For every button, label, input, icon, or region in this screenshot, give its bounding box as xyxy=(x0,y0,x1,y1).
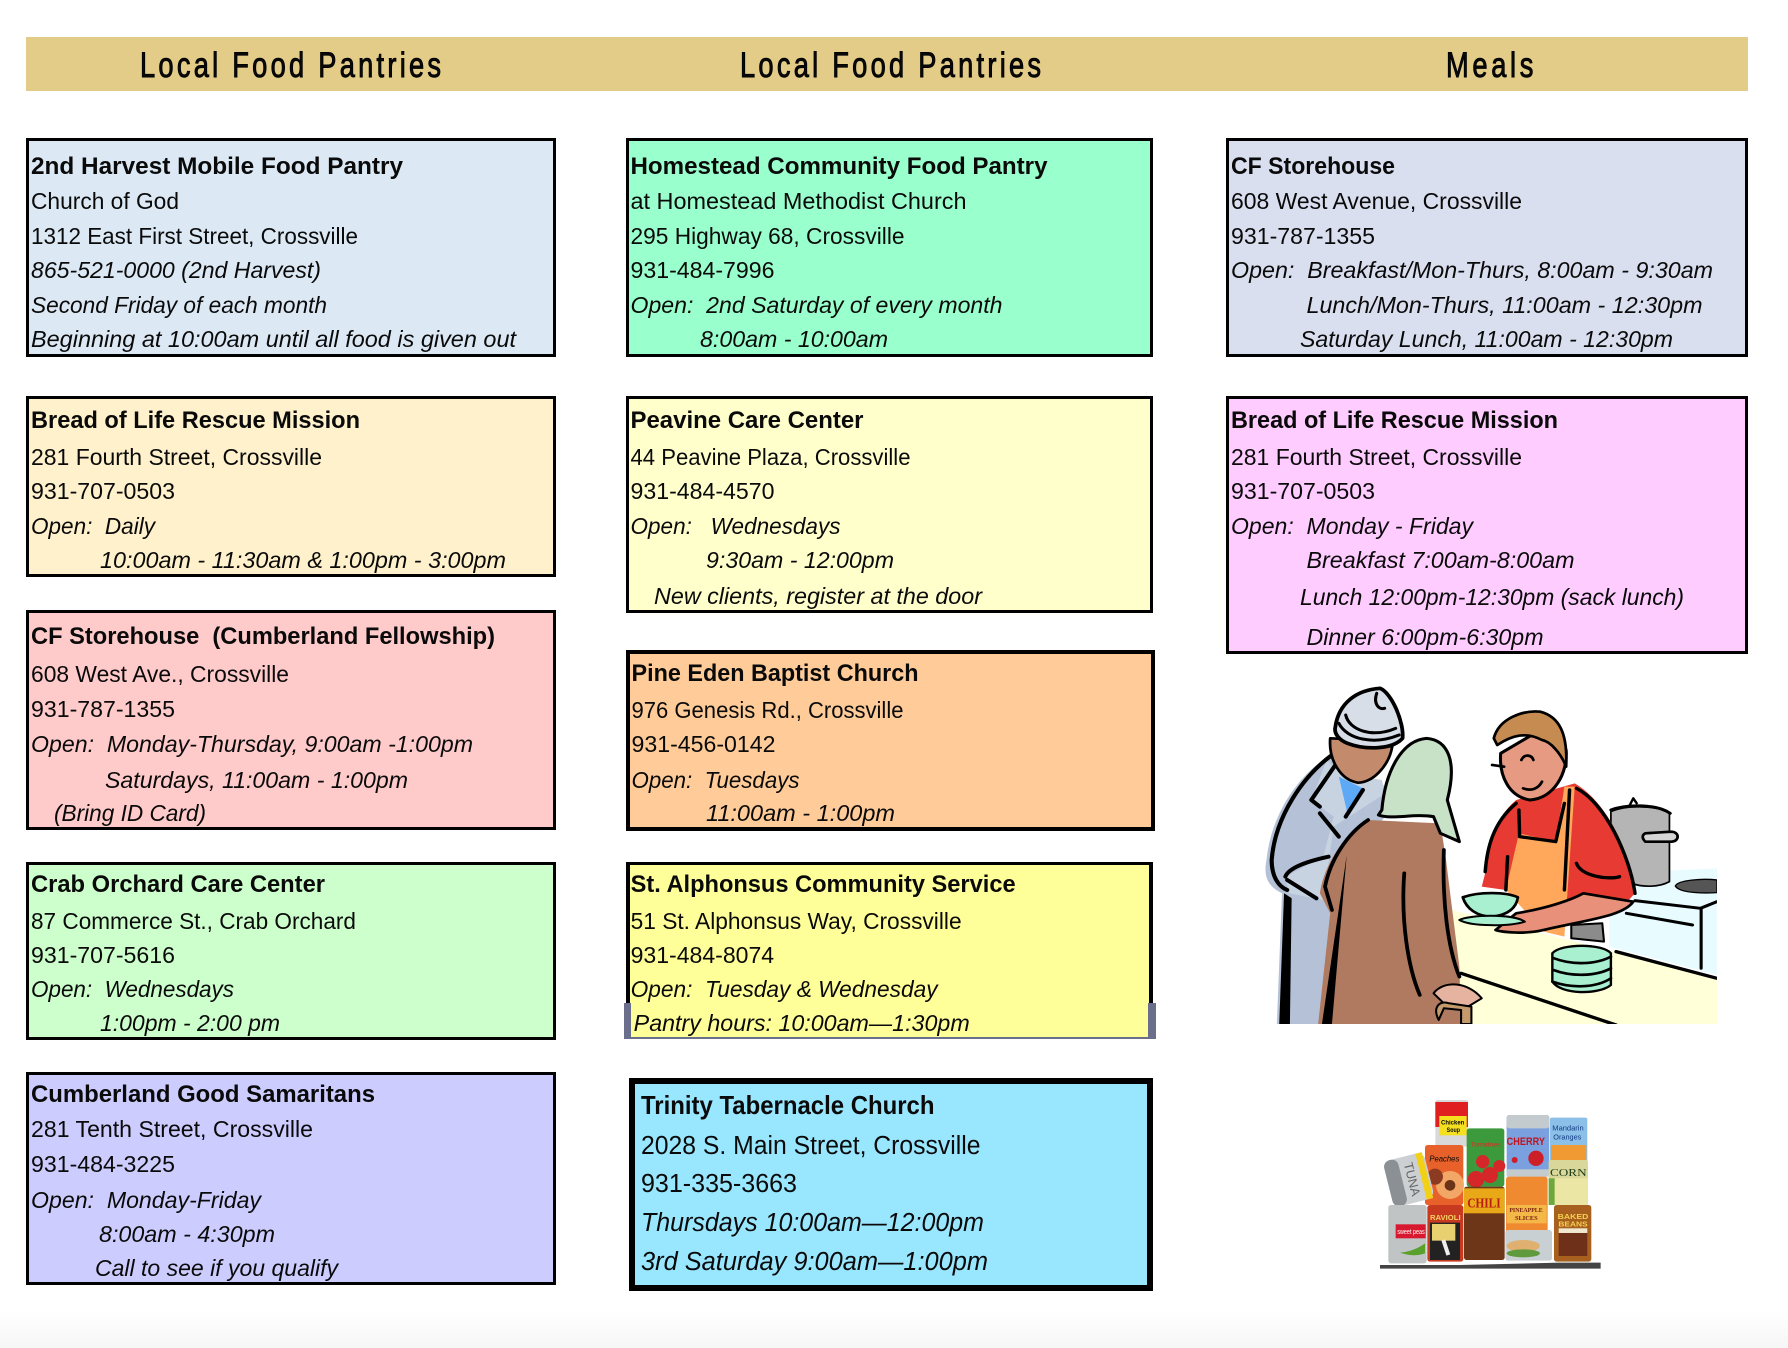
panel details xyxy=(31,1116,339,1281)
can: chili xyxy=(1464,1187,1505,1260)
panel details: 11:00am - 1:00pm xyxy=(706,800,895,826)
panel title: Peavine Care Center xyxy=(630,407,864,434)
header band xyxy=(26,37,1748,91)
counter xyxy=(1452,910,1717,1024)
panel details: New clients, register at the door xyxy=(654,583,983,609)
panel details: 281 Tenth Street, Crossville xyxy=(31,1116,313,1142)
panel details: 931-484-7996 xyxy=(630,257,774,283)
can: ravioli xyxy=(1427,1205,1463,1262)
panel: Homestead Community Food Pantry xyxy=(628,140,1152,356)
panel title: St. Alphonsus Community Service xyxy=(631,871,1016,898)
bowl and stacked plates xyxy=(1459,893,1611,992)
panel: Trinity Tabernacle Church xyxy=(632,1081,1150,1288)
panel details: 295 Highway 68, Crossville xyxy=(630,223,904,249)
panel details xyxy=(31,661,473,826)
panel details: Open: Monday-Friday xyxy=(31,1187,263,1213)
woman in scarf, brown coat xyxy=(1318,738,1482,1024)
panel details: Lunch 12:00pm-12:30pm (sack lunch) xyxy=(1300,584,1684,610)
panel details: Open: Wednesdays xyxy=(630,513,841,539)
panel title: 2nd Harvest Mobile Food Pantry xyxy=(31,153,404,180)
can: ravioli: RAVIOLI xyxy=(1430,1213,1461,1222)
man in hat, coat xyxy=(1265,688,1403,1024)
panel details xyxy=(632,697,904,826)
panel title: Crab Orchard Care Center xyxy=(31,871,325,898)
panel: St. Alphonsus Community Service xyxy=(624,862,1156,1039)
panel details: Call to see if you qualify xyxy=(95,1255,339,1281)
can: chili: CHILI xyxy=(1467,1195,1501,1210)
panel details: 865-521-0000 (2nd Harvest) xyxy=(31,257,321,283)
can: tuna on its side xyxy=(1383,1152,1435,1208)
panel details: 1312 East First Street, Crossville xyxy=(31,223,358,249)
can: tomatoes: Tomatoes xyxy=(1471,1143,1501,1149)
panel details: 281 Fourth Street, Crossville xyxy=(31,444,322,470)
can: peaches: Peaches xyxy=(1429,1153,1459,1163)
panel: Bread of Life Rescue Mission meals xyxy=(1228,398,1746,652)
can: baked beans: BAKED xyxy=(1558,1212,1588,1221)
panel details: Dinner 6:00pm-6:30pm xyxy=(1306,624,1544,650)
can: baked beans: BEANS xyxy=(1558,1220,1588,1229)
panel details xyxy=(630,444,983,609)
heading: local food pantries column 2: Local Food Pantries xyxy=(740,46,1041,85)
can: sweet peas: sweet peas xyxy=(1397,1227,1425,1236)
panel: Pine Eden Baptist Church xyxy=(628,652,1153,829)
can: chicken soup: Chicken xyxy=(1441,1121,1465,1127)
panel details xyxy=(31,908,356,1036)
panel details: 608 West Avenue, Crossville xyxy=(1231,188,1522,214)
can: chicken soup xyxy=(1435,1100,1468,1147)
panel details: 976 Genesis Rd., Crossville xyxy=(632,697,904,723)
panel: Cumberland Good Samaritans xyxy=(28,1074,554,1284)
panel: Peavine Care Center xyxy=(628,398,1152,612)
heading: meals column: Meals xyxy=(1446,46,1533,85)
panel details: Open: 2nd Saturday of every month xyxy=(630,292,1002,318)
panel details: 10:00am - 11:30am & 1:00pm - 3:00pm xyxy=(100,547,506,573)
panel: Bread of Life Rescue Mission pantry xyxy=(28,398,554,576)
panel details: 931-787-1355 xyxy=(31,696,175,722)
can: tuna on its side: TUNA xyxy=(1401,1161,1423,1198)
illustration: stacked food cans xyxy=(1380,1100,1601,1269)
panel details: Beginning at 10:00am until all food is given out xyxy=(31,326,518,352)
panel details: 931-707-0503 xyxy=(31,478,175,504)
panel details: 931-484-8074 xyxy=(631,942,774,968)
panel title: CF Storehouse (Cumberland Fellowship) xyxy=(31,623,495,650)
panel details: (Bring ID Card) xyxy=(54,800,206,826)
panel details: 931-484-3225 xyxy=(31,1151,175,1177)
panel: Crab Orchard Care Center xyxy=(28,864,554,1038)
panel details xyxy=(641,1132,988,1276)
pot xyxy=(1611,798,1678,886)
panel details: 931-335-3663 xyxy=(641,1170,797,1198)
panel details: 931-707-5616 xyxy=(31,942,175,968)
panel title: Bread of Life Rescue Mission xyxy=(1231,407,1558,434)
panel details: Open: Wednesdays xyxy=(31,976,234,1002)
panel details: Second Friday of each month xyxy=(31,292,327,318)
can: mandarin oranges xyxy=(1550,1118,1587,1161)
panel details: 2028 S. Main Street, Crossville xyxy=(641,1132,980,1160)
can: pineapple slices: PINEAPPLE xyxy=(1509,1207,1543,1214)
panel details xyxy=(631,908,970,1036)
panel details: Open: Monday-Thursday, 9:00am -1:00pm xyxy=(31,731,473,757)
shelf xyxy=(1380,1263,1601,1269)
panel details: 931-707-0503 xyxy=(1231,478,1375,504)
can: mandarin oranges: Oranges xyxy=(1553,1134,1582,1141)
panel details: Pantry hours: 10:00am—1:30pm xyxy=(634,1010,970,1036)
panel title: Bread of Life Rescue Mission xyxy=(31,407,360,434)
panel title: Pine Eden Baptist Church xyxy=(632,660,918,687)
panel details: at Homestead Methodist Church xyxy=(630,188,966,214)
panel title: Trinity Tabernacle Church xyxy=(641,1090,934,1120)
can: baked beans xyxy=(1554,1205,1591,1262)
panel details xyxy=(1231,188,1713,352)
panel details: 9:30am - 12:00pm xyxy=(706,547,894,573)
panel details: Saturday Lunch, 11:00am - 12:30pm xyxy=(1300,326,1673,352)
panel details: Open: Tuesdays xyxy=(632,767,800,793)
can: mandarin oranges: Mandarin xyxy=(1552,1126,1584,1133)
can: tomatoes xyxy=(1467,1128,1505,1188)
panel details: Thursdays 10:00am—12:00pm xyxy=(641,1209,984,1237)
can: sweet peas xyxy=(1388,1205,1427,1263)
panel details: 8:00am - 10:00am xyxy=(700,326,888,352)
can: pineapple slices: SLICES xyxy=(1515,1215,1538,1222)
panel details: Open: Breakfast/Mon-Thurs, 8:00am - 9:30am xyxy=(1231,257,1713,283)
can: peaches xyxy=(1425,1145,1464,1205)
panel details: Lunch/Mon-Thurs, 11:00am - 12:30pm xyxy=(1306,292,1702,318)
panel details: Church of God xyxy=(31,188,179,214)
server with apron xyxy=(1482,711,1635,942)
panel details xyxy=(31,444,506,573)
can: sandwich spread xyxy=(1505,1230,1552,1261)
panel details: Open: Tuesday & Wednesday xyxy=(631,976,939,1002)
panel title: Homestead Community Food Pantry xyxy=(630,153,1048,180)
panel title: CF Storehouse xyxy=(1231,153,1395,180)
can: corn xyxy=(1549,1160,1588,1205)
panel details xyxy=(1231,444,1684,650)
panel details: Open: Daily xyxy=(31,513,156,539)
can: cherry xyxy=(1507,1115,1549,1177)
illustration: volunteer serving food to visitors xyxy=(1265,688,1717,1025)
panel details: 51 St. Alphonsus Way, Crossville xyxy=(631,908,962,934)
panel details: 281 Fourth Street, Crossville xyxy=(1231,444,1522,470)
panel: CF Storehouse Cumberland Fellowship xyxy=(28,612,554,828)
panel details: 931-456-0142 xyxy=(632,731,776,757)
panel: 2nd Harvest Mobile Food Pantry xyxy=(28,140,554,356)
panel details: 608 West Ave., Crossville xyxy=(31,661,289,687)
panel details: 3rd Saturday 9:00am—1:00pm xyxy=(641,1248,988,1276)
panel details: Open: Monday - Friday xyxy=(1231,513,1474,539)
heading: local food pantries column 1: Local Food Pantries xyxy=(140,46,441,85)
panel details xyxy=(630,188,1002,352)
panel: CF Storehouse meals xyxy=(1228,140,1746,356)
panel details: 87 Commerce St., Crab Orchard xyxy=(31,908,356,934)
can: cherry: CHERRY xyxy=(1507,1136,1545,1148)
panel details: Breakfast 7:00am-8:00am xyxy=(1306,547,1574,573)
panel details: 8:00am - 4:30pm xyxy=(99,1221,275,1247)
can: chicken soup: Soup xyxy=(1447,1128,1460,1134)
panel details: 1:00pm - 2:00 pm xyxy=(100,1010,280,1036)
panel details: Saturdays, 11:00am - 1:00pm xyxy=(105,767,408,793)
panel details xyxy=(31,188,518,352)
panel title: Cumberland Good Samaritans xyxy=(31,1081,375,1108)
can: pineapple slices xyxy=(1506,1177,1548,1233)
panel details: 44 Peavine Plaza, Crossville xyxy=(630,444,910,470)
can: corn: CORN xyxy=(1550,1167,1587,1179)
panel details: 931-787-1355 xyxy=(1231,223,1375,249)
stove xyxy=(1609,868,1717,975)
panel details: 931-484-4570 xyxy=(630,478,774,504)
